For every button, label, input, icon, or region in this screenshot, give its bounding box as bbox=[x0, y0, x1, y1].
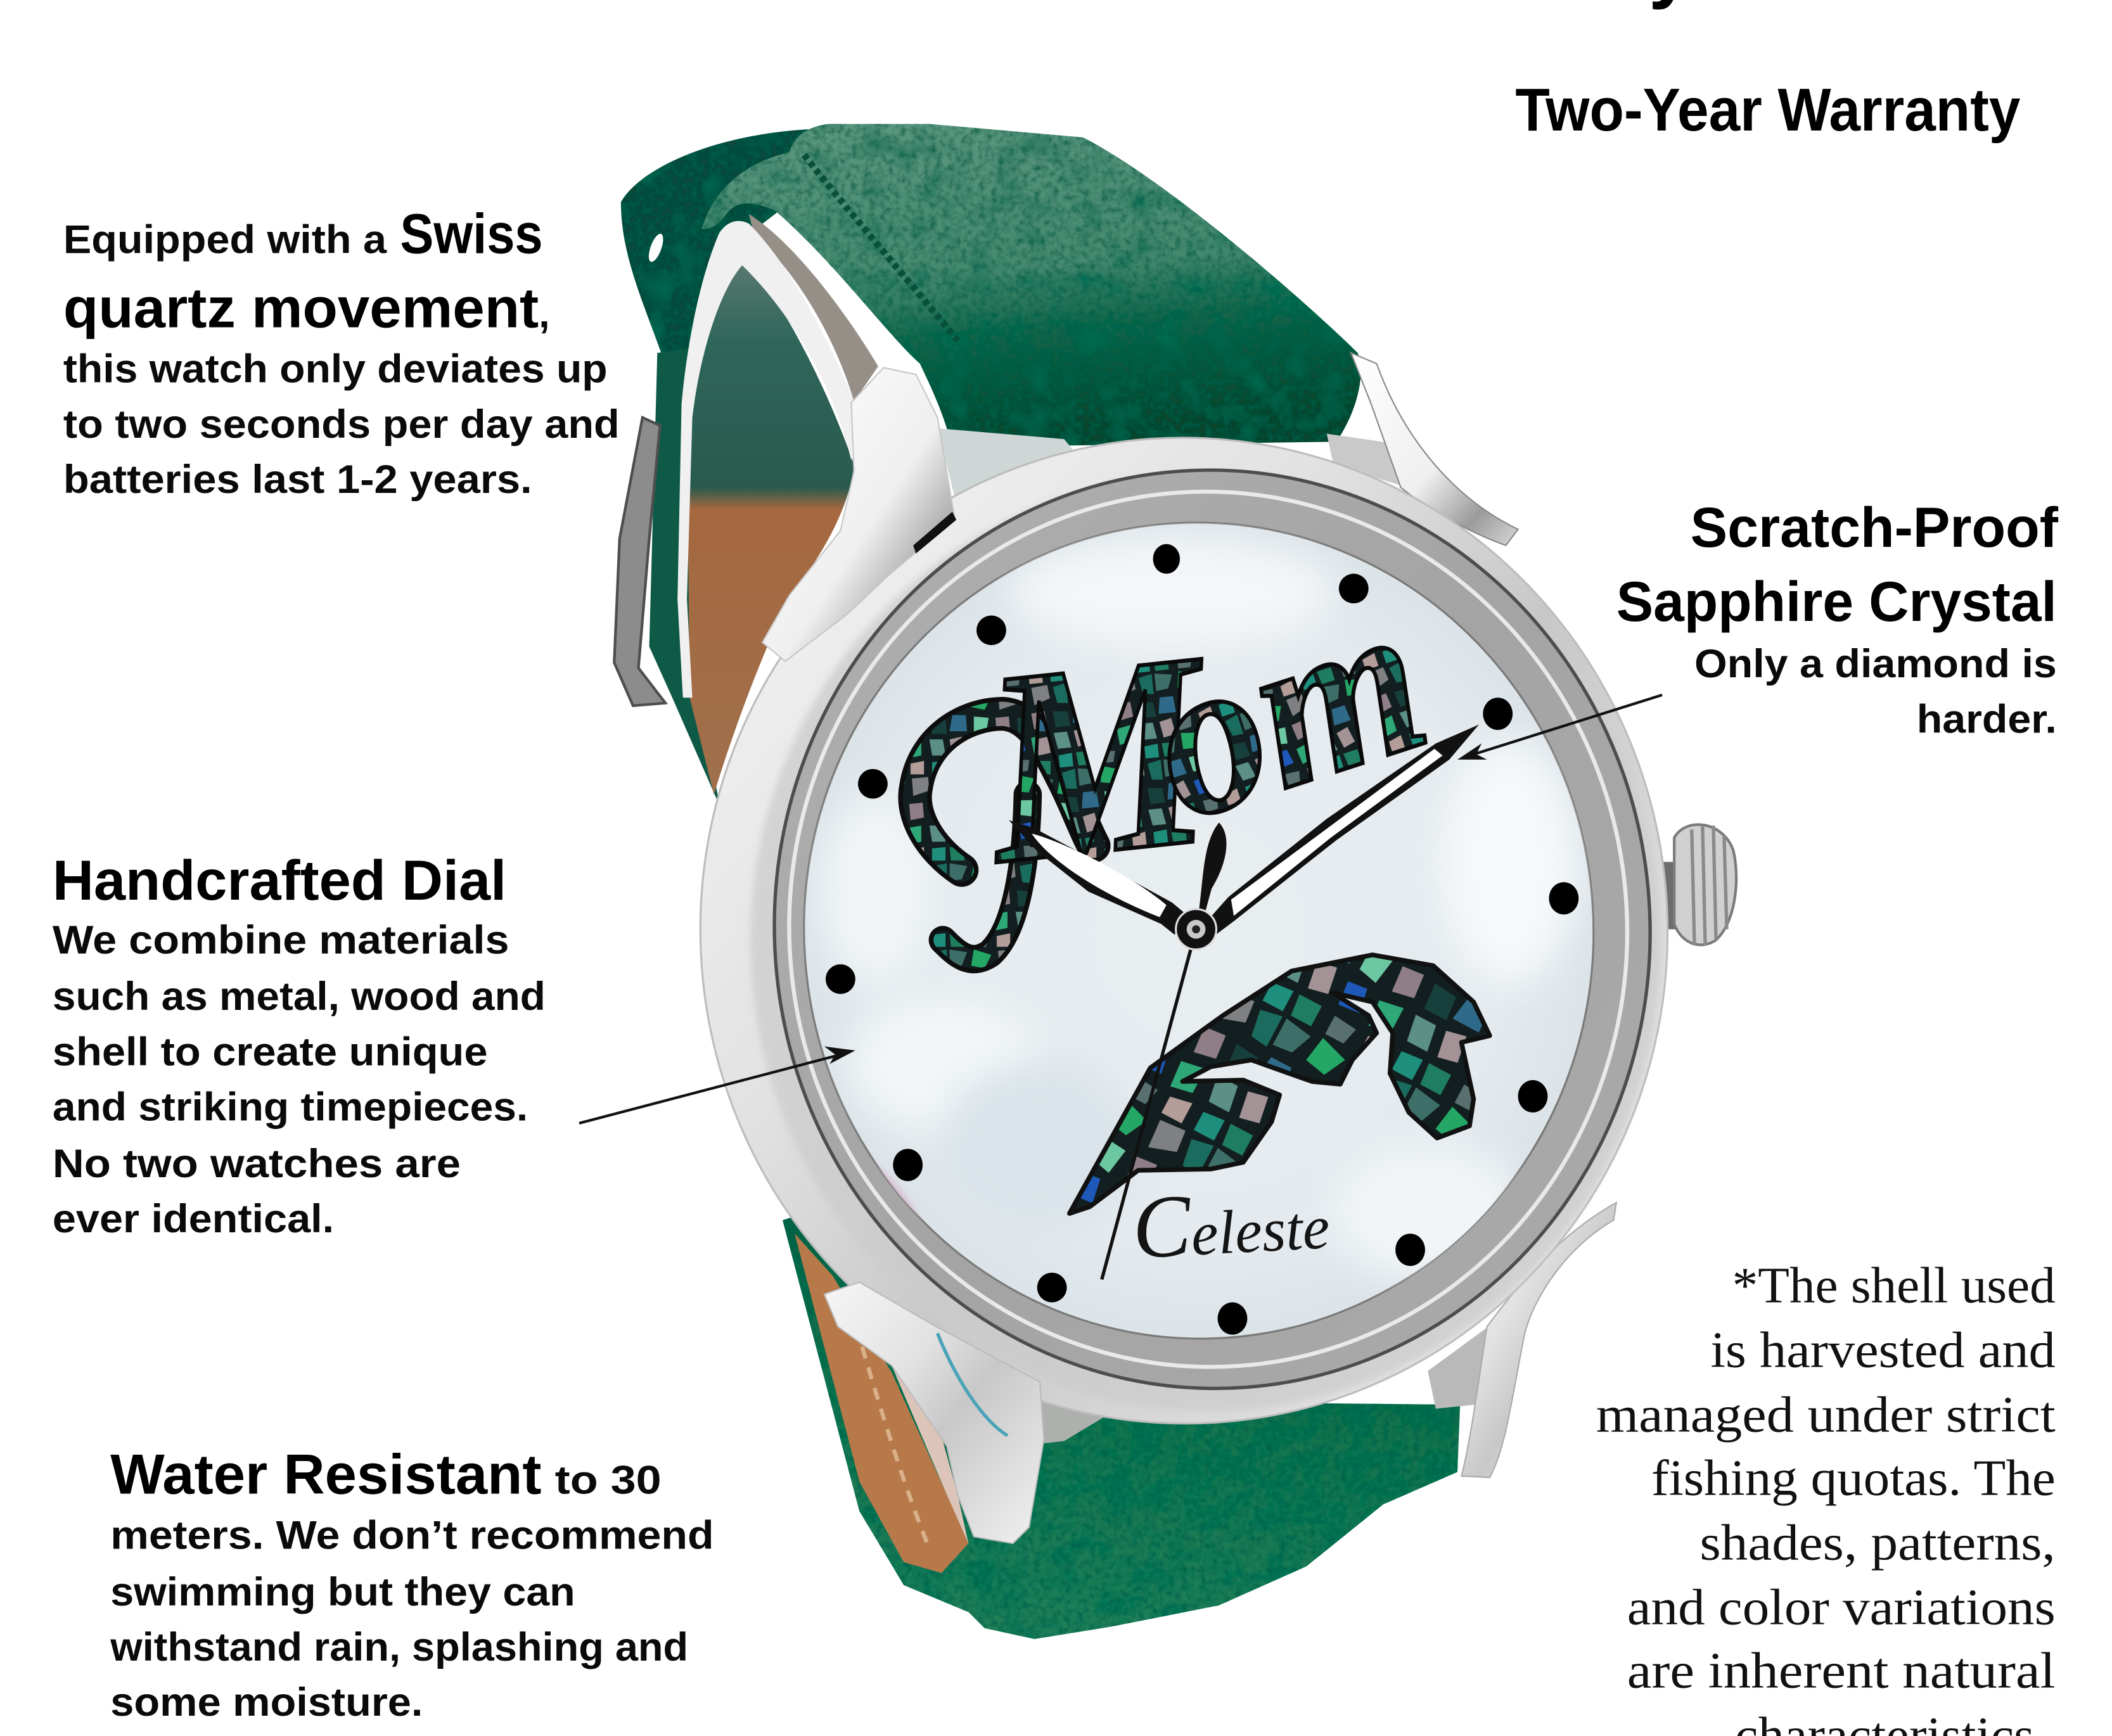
back strap loop bbox=[621, 129, 808, 361]
spring bar top-left bbox=[937, 428, 1078, 514]
hour hand bbox=[1009, 820, 1188, 935]
text block: swiss quartz movement: to two seconds per day and bbox=[63, 402, 620, 447]
case shade bbox=[719, 444, 1693, 1442]
text block: handcrafted dial: shell to create unique bbox=[53, 1030, 487, 1074]
dial word: Mom: om bbox=[1122, 551, 1451, 867]
strap gap bbox=[646, 232, 666, 264]
spring bar top-right bbox=[1327, 433, 1407, 488]
hub bbox=[1176, 909, 1216, 950]
text block: shell note: *The shell used bbox=[1732, 1258, 2056, 1314]
text block: swiss quartz movement bbox=[63, 202, 620, 502]
mother of pearl blotches bbox=[1010, 539, 1333, 646]
watch illustration bbox=[614, 124, 1736, 1639]
strap tan lining bbox=[795, 1234, 968, 1573]
text block: water resistant: swimming but they can bbox=[110, 1570, 575, 1614]
second hand bbox=[1102, 950, 1191, 1279]
text block: handcrafted dial: such as metal, wood and bbox=[53, 974, 546, 1019]
text block: scratch-proof sapphire crystal bbox=[1616, 495, 2058, 741]
case bbox=[667, 405, 1701, 1456]
left strap behind case bbox=[650, 347, 720, 808]
brand name: Celeste bbox=[1130, 1169, 1331, 1277]
lug slit bbox=[913, 512, 956, 554]
lining stitches bbox=[862, 1347, 930, 1549]
crown knurled head bbox=[1674, 824, 1736, 945]
text block: shell note: and color variations bbox=[1627, 1580, 2056, 1636]
text block: handcrafted dial: We combine materials bbox=[53, 918, 509, 962]
text block: handcrafted dial bbox=[53, 848, 546, 1241]
text block: water resistant: Water Resistant bbox=[110, 1442, 542, 1505]
bottom left lug bbox=[824, 1282, 1044, 1543]
text block: swiss quartz movement: Swiss bbox=[400, 202, 543, 265]
bottom strap bbox=[783, 1212, 1460, 1639]
text block: handcrafted dial: ever identical. bbox=[53, 1197, 334, 1241]
second hand counterweight bbox=[1198, 822, 1227, 919]
text block: water resistant: withstand rain, splashing and bbox=[110, 1625, 688, 1669]
top right lug bbox=[1351, 353, 1518, 546]
bottom right lug bbox=[1461, 1203, 1616, 1478]
gray case-back band bbox=[749, 214, 878, 401]
crown bbox=[1651, 824, 1736, 945]
text block: shell note: shades, patterns, bbox=[1700, 1515, 2056, 1571]
strap stitch line bbox=[804, 155, 959, 342]
text block: scratch-proof sapphire crystal: Scratch-Proof bbox=[1691, 495, 2058, 559]
text block: shell note: managed under strict bbox=[1596, 1387, 2056, 1443]
minute hand bbox=[1207, 725, 1479, 937]
arrow: sapphire crystal bbox=[1457, 695, 1662, 760]
text block: handcrafted dial: Handcrafted Dial bbox=[53, 848, 506, 912]
text block: swiss quartz movement: , bbox=[539, 292, 550, 336]
silver case-back arc bbox=[677, 221, 854, 698]
text block: handcrafted dial: and striking timepieces. bbox=[53, 1085, 528, 1130]
buckle bbox=[614, 418, 665, 706]
heading: two-year warranty: Two-Year Warranty bbox=[1515, 76, 2020, 144]
leaf inlay bbox=[1070, 955, 1490, 1213]
text block: swiss quartz movement: batteries last 1-2 years. bbox=[63, 457, 532, 502]
text block: shell note: fishing quotas. The bbox=[1651, 1450, 2056, 1506]
dial word: Mom: M bbox=[970, 595, 1228, 922]
text block: water resistant: meters. We don’t recommend bbox=[110, 1514, 714, 1558]
top left lug bbox=[762, 367, 955, 661]
crown stem bbox=[1651, 862, 1684, 929]
bezel highlight bbox=[760, 463, 1656, 1395]
text block: handcrafted dial: No two watches are bbox=[53, 1142, 461, 1186]
bottom spring bar left bbox=[1037, 1387, 1104, 1444]
text block: water resistant: some moisture. bbox=[110, 1680, 423, 1725]
text block: swiss quartz movement: Equipped with a bbox=[63, 218, 387, 262]
text block: shell note: are inherent natural bbox=[1627, 1642, 2056, 1699]
text block: scratch-proof sapphire crystal: harder. bbox=[1917, 697, 2057, 741]
text block: swiss quartz movement: quartz movement bbox=[63, 276, 539, 340]
M flourish left curl bbox=[915, 714, 1094, 870]
dial word: Mom bbox=[970, 551, 1451, 922]
M flourish stem bbox=[943, 795, 1028, 959]
bezel bbox=[743, 440, 1681, 1418]
dial bbox=[803, 521, 1594, 1339]
text block: water resistant bbox=[110, 1442, 714, 1725]
text block: swiss quartz movement: this watch only deviates up bbox=[63, 347, 608, 392]
text block: shell note: is harvested and bbox=[1711, 1322, 2056, 1379]
text block: shell note bbox=[1596, 1258, 2056, 1736]
hour markers bbox=[826, 544, 1578, 1335]
glass interior showing strap lining bbox=[687, 256, 854, 795]
front top strap bbox=[701, 124, 1361, 447]
lug blue reflection bbox=[937, 1333, 1008, 1436]
text block: scratch-proof sapphire crystal: Only a diamond is bbox=[1694, 642, 2057, 686]
arrow: handcrafted dial bbox=[579, 1047, 855, 1123]
bottom spring bar right bbox=[1428, 1327, 1488, 1408]
lining inner pink gap bbox=[892, 1365, 968, 1543]
text block: water resistant: to 30 bbox=[555, 1458, 662, 1502]
text block: scratch-proof sapphire crystal: Sapphire Crystal bbox=[1616, 570, 2057, 633]
